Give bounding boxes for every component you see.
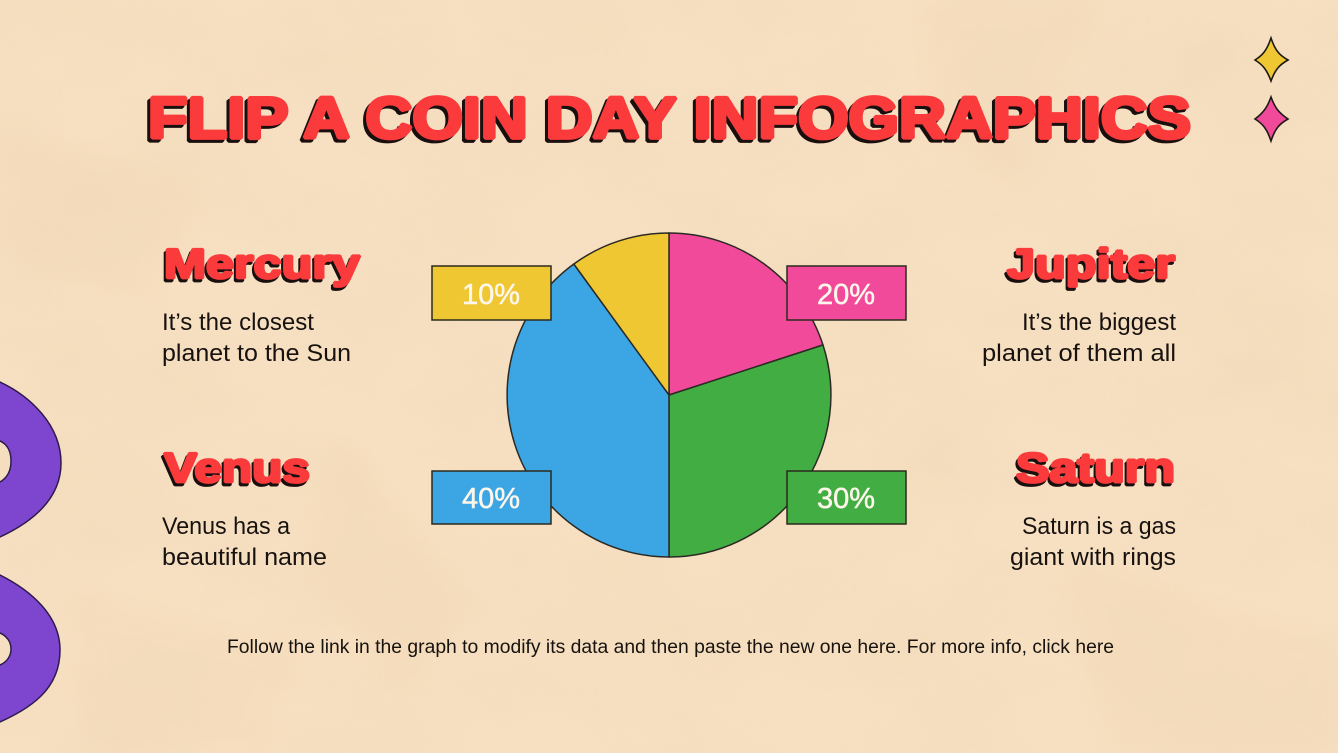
text: Mercury description: It’s the closest [162, 309, 314, 336]
panel: Venus [162, 444, 327, 571]
panel: Saturn [1010, 444, 1176, 571]
text: Mercury description [162, 309, 351, 367]
heading: Venus: Venus [164, 444, 310, 491]
heading: Jupiter: Jupiter [1007, 240, 1175, 287]
label: 10% [432, 266, 551, 320]
text: Saturn description: Saturn is a gas [1022, 513, 1176, 540]
label: 30%: 30% [817, 483, 875, 515]
label: 40% [432, 471, 551, 524]
panel: Mercury [162, 240, 361, 367]
heading: Saturn: Saturn [1016, 444, 1175, 491]
text: Venus description: beautiful name [162, 544, 327, 571]
label: 10%: 10% [462, 279, 520, 311]
text: Jupiter description: planet of them all [982, 340, 1176, 367]
heading: Mercury: Mercury [162, 243, 359, 290]
text: Saturn description [1010, 513, 1176, 571]
slice: blue 40% [507, 264, 669, 557]
heading: Saturn: Saturn [1014, 447, 1173, 494]
text: Venus description: Venus has a [162, 513, 291, 540]
heading: Venus: Venus [162, 447, 308, 494]
text: Mercury description: planet to the Sun [162, 340, 351, 367]
text: Venus description [162, 513, 327, 571]
footer note: Follow the link in the graph to modify its data and then paste the new one here. For more info, click here [227, 637, 1114, 658]
heading: Jupiter: Jupiter [1005, 243, 1173, 290]
label: 30% [787, 471, 906, 524]
decoration: purple squiggle [0, 380, 61, 724]
slice: yellow 10% [574, 233, 669, 395]
heading: Mercury: Mercury [164, 240, 361, 287]
panel: Jupiter [982, 240, 1176, 367]
label: 20% [787, 266, 906, 320]
icon: yellow sparkle [1255, 38, 1288, 81]
pie chart [507, 233, 831, 557]
icon: pink sparkle [1255, 97, 1288, 141]
text: Saturn description: giant with rings [1010, 544, 1176, 571]
slice: pink 20% [669, 233, 823, 395]
label: 40%: 40% [462, 483, 520, 515]
slice: green 30% [669, 345, 831, 557]
label: 20%: 20% [817, 279, 875, 311]
text: Jupiter description [982, 309, 1176, 367]
title: FLIP A COIN DAY INFOGRAPHICS [145, 89, 1188, 154]
title: FLIP A COIN DAY INFOGRAPHICS [148, 86, 1191, 151]
text: Jupiter description: It’s the biggest [1022, 309, 1176, 336]
